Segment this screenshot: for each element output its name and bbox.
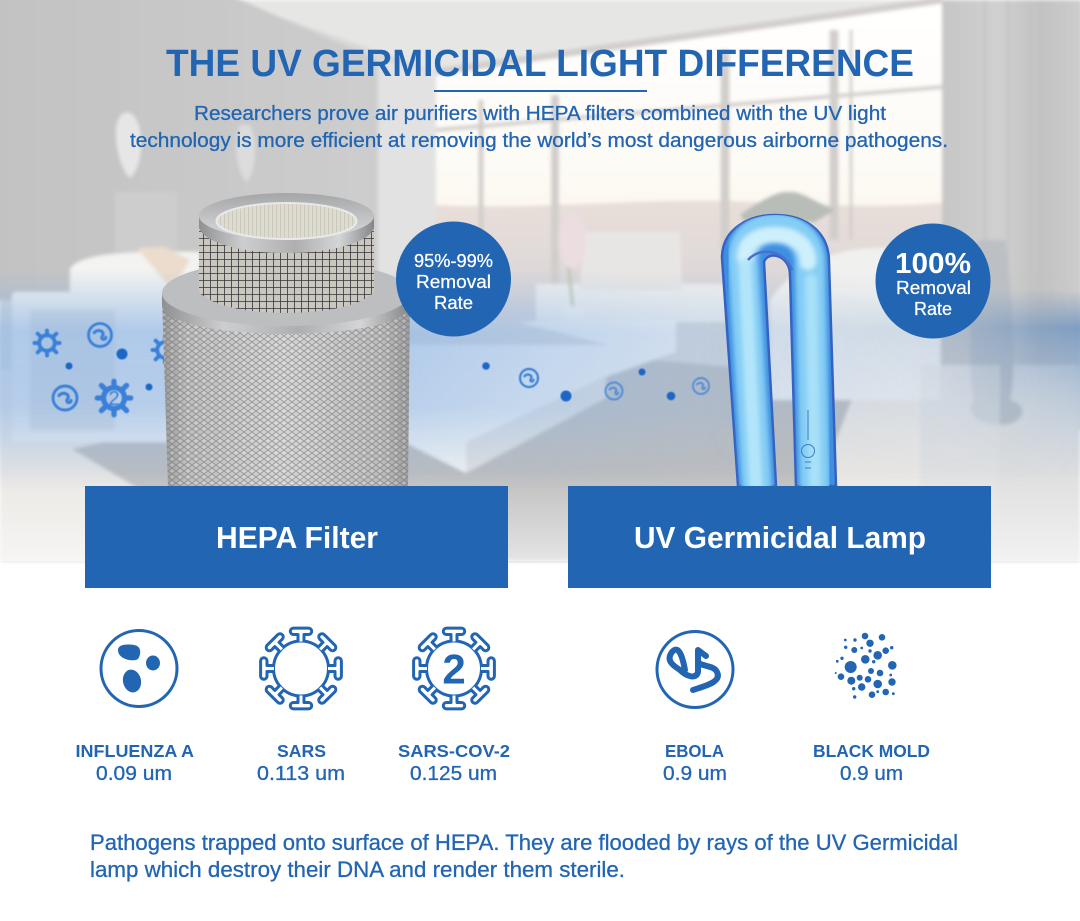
label: SARS: SARS bbox=[277, 741, 326, 761]
label: black mold bbox=[813, 741, 930, 785]
panel: UV germicidal lamp banner bbox=[568, 486, 991, 588]
label: SARS-COV-2: 0.125 um bbox=[410, 763, 497, 785]
right sofa bbox=[770, 246, 940, 400]
HEPA filter cartridge bbox=[162, 193, 410, 486]
plant on table bbox=[568, 260, 573, 310]
label: black mold: BLACK MOLD bbox=[813, 741, 930, 761]
fade to white bbox=[0, 470, 1080, 561]
label: SARS-COV-2: SARS-COV-2 bbox=[398, 741, 510, 761]
subtitle: technology is more efficient at removing the world’s most dangerous airborne pathogens. bbox=[130, 130, 948, 152]
icon: influenza A bbox=[101, 630, 177, 706]
filter outer body bbox=[162, 296, 410, 486]
pathogens floating in the air bbox=[35, 324, 740, 415]
panel: HEPA filter banner bbox=[85, 486, 508, 588]
title underline bbox=[434, 90, 647, 92]
label: influenza A: 0.09 um bbox=[96, 763, 172, 785]
air purifier bbox=[30, 310, 115, 430]
left cabinet and vases bbox=[115, 192, 177, 252]
carpet bbox=[72, 350, 860, 561]
icon: SARS-CoV-2 virus: 2 bbox=[442, 646, 466, 692]
filter inner mesh bbox=[199, 222, 374, 313]
subtitle bbox=[130, 103, 948, 152]
lamp etched marks bbox=[802, 410, 814, 468]
left sofa bbox=[70, 252, 200, 320]
left wall bbox=[0, 0, 378, 300]
background: living room photo bbox=[0, 0, 1080, 562]
badge: 100% removal rate: Rate bbox=[914, 299, 952, 319]
badge: 95%-99% removal rate: 95%-99% bbox=[414, 251, 493, 271]
subtitle: Researchers prove air purifiers with HEPA filters combined with the UV light bbox=[194, 103, 886, 125]
panel: HEPA filter banner: HEPA Filter bbox=[216, 520, 378, 555]
label: SARS bbox=[257, 741, 345, 785]
label: SARS-COV-2 bbox=[398, 741, 510, 785]
label: ebola: 0.9 um bbox=[663, 763, 727, 785]
label: ebola: EBOLA bbox=[665, 741, 724, 761]
UV germicidal lamp bbox=[722, 215, 836, 490]
right curtains bbox=[942, 0, 1080, 430]
blue air haze right bbox=[832, 294, 1080, 461]
label: ebola bbox=[663, 741, 727, 785]
ceiling bbox=[232, 0, 950, 72]
back sofa bbox=[536, 284, 726, 322]
label: black mold: 0.9 um bbox=[840, 763, 903, 785]
title: THE UV GERMICIDAL LIGHT DIFFERENCE bbox=[166, 43, 914, 85]
icon: black mold spores bbox=[835, 633, 897, 699]
closing explanation text: Pathogens trapped onto surface of HEPA. They are flooded by rays of the UV Germicidal bbox=[90, 830, 958, 855]
coffee tables bbox=[518, 320, 676, 376]
label: influenza A bbox=[76, 741, 194, 785]
window sky bbox=[436, 0, 942, 300]
label: SARS: 0.113 um bbox=[257, 763, 345, 785]
filter top ring bbox=[199, 215, 374, 253]
badge: 100% removal rate: 100% bbox=[895, 248, 971, 280]
badge: 95%-99% removal rate: Rate bbox=[434, 293, 473, 313]
right vase and console bbox=[970, 240, 1022, 425]
label: influenza A: INFLUENZA A bbox=[76, 741, 194, 761]
floor bbox=[0, 370, 1080, 562]
pillar bbox=[378, 60, 436, 300]
window frame bbox=[436, 0, 942, 310]
distant hills bbox=[436, 200, 942, 320]
icon: SARS-CoV-2 virus bbox=[414, 628, 494, 709]
plant behind lamp bbox=[740, 192, 835, 222]
badge: 95%-99% removal rate: Removal bbox=[416, 272, 491, 292]
icon: ebola bbox=[657, 632, 733, 708]
closing explanation text: lamp which destroy their DNA and render them sterile. bbox=[90, 857, 625, 882]
pathogens floating in the air: 2 bbox=[108, 388, 120, 410]
icon: SARS virus bbox=[261, 628, 341, 709]
badge: 100% removal rate bbox=[876, 224, 990, 338]
badge: 100% removal rate: Removal bbox=[896, 278, 971, 298]
closing explanation text bbox=[90, 830, 958, 882]
filter shoulder rim bbox=[162, 293, 410, 334]
panel: UV germicidal lamp banner: UV Germicidal Lamp bbox=[634, 520, 926, 555]
blue air haze left bbox=[0, 276, 950, 479]
badge: 95%-99% removal rate bbox=[396, 222, 511, 336]
